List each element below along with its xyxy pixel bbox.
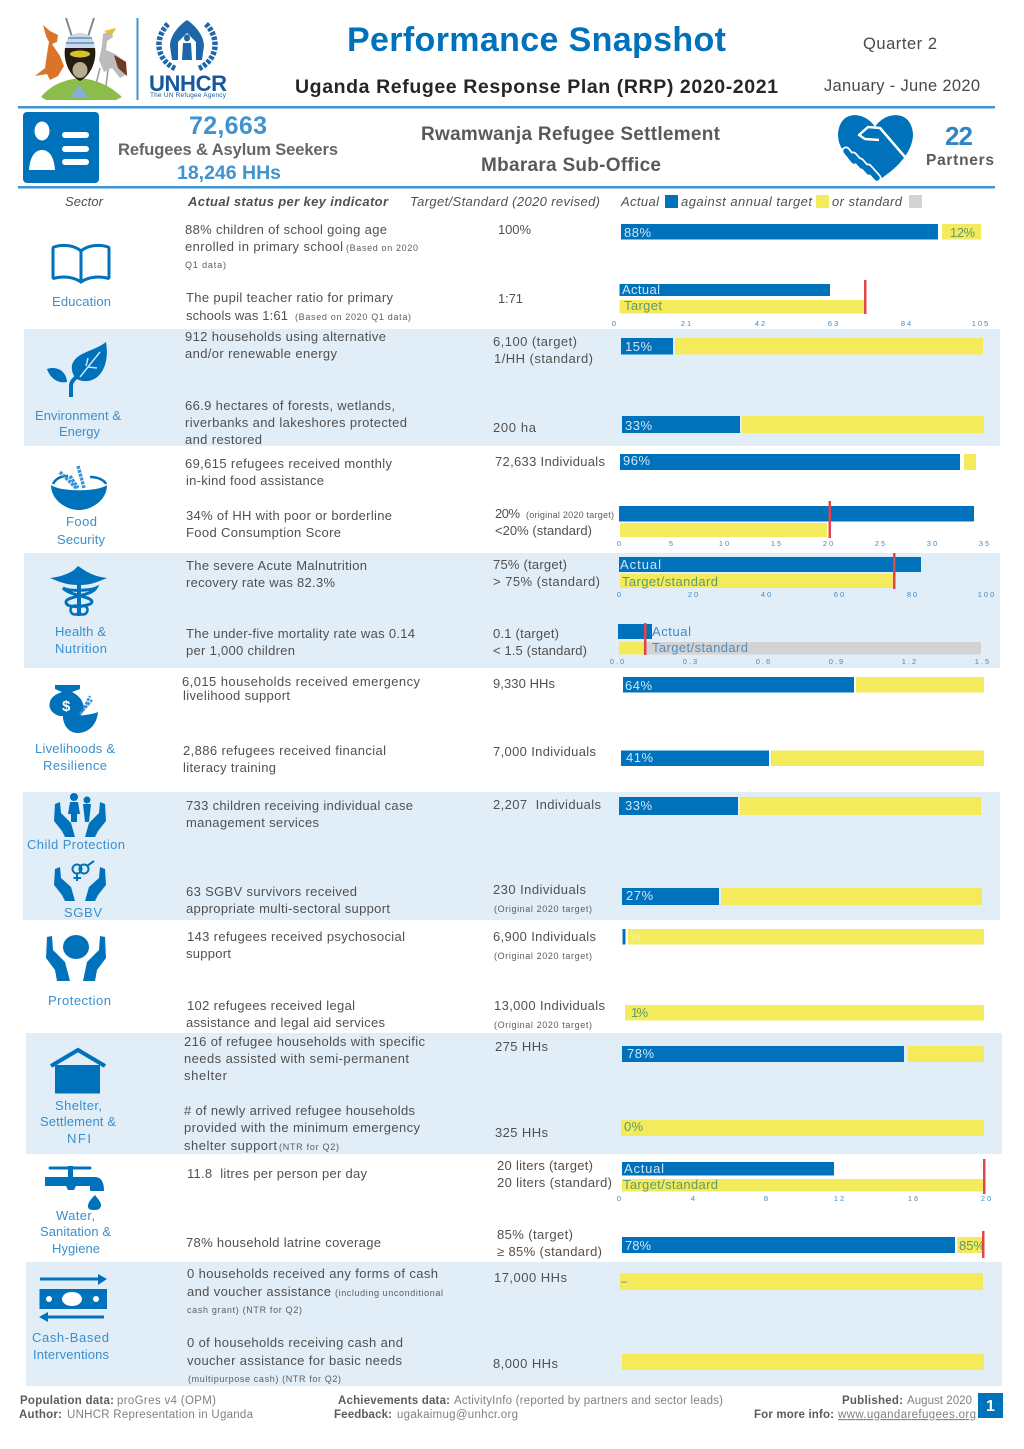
achievements data source: [338, 1395, 723, 1407]
indicator text: emergency shelter: (NTR for Q2): [279, 1142, 339, 1152]
indicator text: legal assistance: [186, 998, 386, 1030]
sector label: Water,: [56, 1208, 95, 1223]
sector label: Environment &: [35, 408, 121, 423]
footer: [19, 1393, 1003, 1421]
published date: August 2020: [907, 1395, 972, 1407]
indicator text: basic needs: 0 of households receiving cash and: [187, 1335, 403, 1350]
table header and legend: Actual: [620, 194, 660, 209]
indicator text: food consumption score: [186, 508, 392, 540]
indicator text: emergency shelter: provided with the minimum emergency: [184, 1120, 420, 1135]
target: pupil teacher ratio: 1:71: [498, 291, 523, 306]
bar: forests: 33%: [625, 418, 652, 433]
logo: UNHCR: [149, 20, 227, 99]
chart: pupil teacher ratio: 42: [755, 319, 767, 328]
sector label: Security: [57, 532, 106, 547]
bar: financial literacy: [621, 750, 984, 766]
chart: malnutrition: Target/standard: [622, 574, 718, 589]
sector label: SGBV: [64, 905, 102, 920]
panel: sector band environment: [24, 329, 1000, 446]
chart: malnutrition: 20: [688, 590, 700, 599]
bar: emergency shelter: [621, 1119, 984, 1136]
target: emergency livelihood: 9,330 HHs: [493, 676, 556, 691]
indicator text: legal assistance: assistance and legal aid services: [186, 1015, 386, 1030]
sector label: [35, 408, 121, 439]
chart: food consumption score: 25: [875, 539, 887, 548]
feedback contact: [334, 1409, 518, 1421]
target: malnutrition: 75% (target): [493, 557, 567, 572]
chart: mortality: 0.0: [610, 657, 626, 666]
table header and legend: Actual status per key indicator: [187, 194, 389, 209]
chart: litres per person: 8: [764, 1194, 770, 1203]
partners count: 22: [945, 121, 973, 151]
households: 18,246 HHs: [177, 162, 281, 184]
bar: case management: 33%: [625, 798, 652, 813]
chart: litres per person: 20: [981, 1194, 993, 1203]
bar: food assistance: [620, 453, 976, 470]
indicator text: semi-permanent shelter: 216 of refugee households with specific: [184, 1034, 426, 1049]
sector row: Cash-Based Interventions: [32, 1266, 984, 1384]
chart: pupil teacher ratio: 63: [828, 319, 840, 328]
icon: money bag and bowl: $: [62, 698, 71, 715]
chart: pupil teacher ratio: Actual: [622, 282, 660, 297]
sub-office: Mbarara Sub-Office: [481, 155, 661, 176]
target: food consumption score: (original 2020 target): [526, 510, 614, 520]
table header and legend: or standard: [832, 194, 903, 209]
sector label: Cash-Based: [32, 1330, 109, 1345]
target: legal assistance: (Original 2020 target): [494, 1020, 592, 1030]
page number: [978, 1393, 1003, 1418]
author: UNHCR Representation in Uganda: [67, 1409, 254, 1421]
target: legal assistance: 13,000 Individuals: [494, 998, 606, 1013]
bar: forests: [622, 416, 984, 433]
icon: hands holding children: [54, 793, 106, 837]
indicator text: malnutrition: The severe Acute Malnutrition: [186, 558, 367, 573]
sector row: Protection: [46, 929, 984, 1030]
indicator text: mortality: [186, 626, 415, 658]
target: mortality: [493, 626, 587, 658]
icon: person id card: [23, 112, 99, 183]
indicator text: pupil teacher ratio: [186, 290, 411, 323]
indicator text: psychosocial support: support: [186, 946, 231, 961]
indicator text: psychosocial support: [186, 929, 405, 961]
target: psychosocial support: [493, 929, 596, 961]
bar: legal assistance: 1%: [631, 1005, 648, 1020]
settlement name: Rwamwanja Refugee Settlement: [421, 124, 721, 145]
indicator text: mortality: The under-five mortality rate was 0.14: [186, 626, 415, 641]
indicator text: forests: [185, 398, 407, 447]
indicator text: financial literacy: 2,886 refugees received financial: [183, 743, 386, 758]
icon: house: [51, 1050, 105, 1094]
chart: mortality: [610, 623, 991, 666]
target: latrine coverage: 85% (target): [497, 1227, 573, 1242]
logo: UNHCR: The UN Refugee Agency: [150, 92, 227, 99]
sector row: Food Security: [51, 453, 991, 548]
achievements data source: Achievements data:: [338, 1395, 450, 1407]
indicator text: psychosocial support: 143 refugees received psychosocial: [187, 929, 405, 944]
indicator text: enrolment: [185, 222, 418, 270]
indicator text: SGBV survivors: 63 SGBV survivors received: [186, 884, 357, 899]
bar: enrolment: 12%: [950, 225, 975, 240]
sector label: Settlement &: [40, 1114, 116, 1129]
bar: semi-permanent shelter: [622, 1046, 984, 1062]
indicator text: semi-permanent shelter: shelter: [184, 1068, 228, 1083]
indicator text: latrine coverage: 78% household latrine coverage: [186, 1235, 381, 1250]
chart: malnutrition: 60: [834, 590, 846, 599]
indicator text: litres per person: 11.8 litres per person per day: [187, 1166, 368, 1181]
achievements data source: ActivityInfo (reported by partners and sector leads): [454, 1395, 723, 1407]
bar: SGBV survivors: 27%: [626, 888, 653, 903]
indicator text: emergency livelihood: [182, 674, 420, 703]
table header and legend: against annual target: [681, 194, 813, 209]
bar: enrolment: 88%: [624, 225, 651, 240]
target: latrine coverage: [497, 1227, 602, 1259]
sector label: Food: [66, 514, 97, 529]
header: [35, 18, 980, 100]
indicator text: food consumption score: 34% of HH with poor or borderline: [186, 508, 392, 523]
target: energy: [493, 334, 593, 366]
chart: litres per person: Target/standard: [623, 1177, 718, 1192]
target: case management: 2,207 Individuals: [493, 797, 602, 812]
chart: food consumption score: 15: [771, 539, 783, 548]
bar: latrine coverage: [622, 1231, 985, 1258]
target: emergency shelter: 325 HHs: [495, 1125, 548, 1140]
page number: 1: [986, 1398, 995, 1415]
bar: emergency livelihood: 64%: [625, 678, 652, 693]
sector label: Child Protection: [27, 837, 125, 852]
indicator text: malnutrition: [186, 558, 367, 590]
bar: emergency livelihood: [623, 677, 984, 693]
indicator text: emergency shelter: shelter support: [184, 1138, 277, 1153]
chart: mortality: 1.2: [902, 657, 918, 666]
icon: money bag and bowl: [49, 685, 98, 733]
target: food consumption score: 20%: [495, 506, 520, 521]
population summary: [23, 112, 994, 184]
target: malnutrition: [493, 557, 600, 589]
indicator text: case management: [186, 798, 413, 830]
indicator text: food assistance: [185, 456, 392, 488]
indicator text: food consumption score: Food Consumption Score: [186, 525, 341, 540]
target: semi-permanent shelter: 275 HHs: [495, 1039, 548, 1054]
indicator text: food assistance: in-kind food assistance: [186, 473, 324, 488]
target: food consumption score: [495, 506, 614, 538]
indicator text: food assistance: 69,615 refugees received monthly: [185, 456, 392, 471]
target: energy: 6,100 (target): [493, 334, 577, 349]
chart: litres per person: 16: [908, 1194, 920, 1203]
partners caption: Partners: [926, 152, 994, 169]
logo: UNHCR: UNHCR: [149, 71, 227, 96]
sector label: Sanitation &: [40, 1224, 111, 1239]
chart: litres per person: 4: [691, 1194, 697, 1203]
author: Author:: [19, 1409, 62, 1421]
indicator text: energy: and/or renewable energy: [185, 346, 338, 361]
chart: food consumption score: 20: [823, 539, 835, 548]
chart: pupil teacher ratio: [612, 280, 990, 328]
target: malnutrition: > 75% (standard): [493, 574, 600, 589]
sector label: Resilience: [43, 758, 107, 773]
icon: hands holding person: [46, 935, 106, 981]
bar: case management: [619, 797, 981, 815]
bar: latrine coverage: 85%: [959, 1238, 985, 1253]
indicator text: pupil teacher ratio: schools was 1:61: [186, 308, 288, 323]
indicator text: emergency shelter: # of newly arrived refugee households: [184, 1103, 416, 1118]
indicator text: cash and voucher: 0 households received any forms of cash: [187, 1266, 438, 1281]
icon: tap and water drop: [45, 1166, 104, 1210]
population caption: Refugees & Asylum Seekers: [118, 141, 338, 159]
indicator text: enrolment: Q1 data): [185, 260, 226, 270]
indicator text: energy: 912 households using alternative: [185, 329, 386, 344]
indicator text: cash and voucher: [187, 1266, 443, 1315]
sector label: NFI: [67, 1131, 91, 1146]
target: mortality: < 1.5 (standard): [493, 643, 587, 658]
panel: sector band shelter: [26, 1033, 1002, 1154]
indicator text: cash and voucher: (including unconditional: [335, 1288, 443, 1298]
indicator text: enrolment: enrolled in primary school: [185, 239, 343, 254]
icon: handshake heart: [838, 115, 913, 178]
indicator text: financial literacy: literacy training: [183, 760, 276, 775]
sector row: SGBV: [54, 861, 982, 920]
target: mortality: 0.1 (target): [493, 626, 559, 641]
chart: mortality: 1.5: [975, 657, 991, 666]
indicator text: basic needs: [187, 1335, 403, 1384]
target: financial literacy: 7,000 Individuals: [493, 744, 596, 759]
subtitle: Uganda Refugee Response Plan (RRP) 2020-2021: [295, 76, 778, 98]
sector row: Child Protection: [27, 793, 981, 852]
target: SGBV survivors: (Original 2020 target): [494, 904, 592, 914]
icon: bowl with wheat: [51, 466, 107, 510]
sector label: Protection: [48, 993, 111, 1008]
indicator text: pupil teacher ratio: The pupil teacher ratio for primary: [186, 290, 394, 305]
indicator text: enrolment: (Based on 2020: [346, 243, 418, 253]
panel: sector band cash: [26, 1262, 1002, 1386]
target: food consumption score: <20% (standard): [495, 523, 592, 538]
table header and legend: Sector: [65, 194, 104, 209]
sector row: Shelter, Settlement and NFI: [40, 1034, 984, 1153]
sector label: [57, 514, 106, 547]
bar: SGBV survivors: [622, 888, 982, 905]
panel: sector band health: [24, 553, 1000, 668]
logo: Uganda coat of arms: [35, 18, 127, 100]
sector label: [40, 1098, 116, 1146]
indicator text: malnutrition: recovery rate was 82.3%: [186, 575, 335, 590]
target: SGBV survivors: 230 Individuals: [493, 882, 586, 897]
table header and legend: [65, 194, 922, 209]
icon: caduceus: [50, 566, 107, 616]
sector row: Environment and Energy: [35, 329, 984, 447]
bar: legal assistance: [625, 1005, 984, 1020]
sector label: Hygiene: [52, 1241, 100, 1256]
indicator text: semi-permanent shelter: needs assisted with semi-permanent: [184, 1051, 409, 1066]
indicator text: semi-permanent shelter: [184, 1034, 426, 1083]
quarter label: Quarter 2: [863, 35, 937, 53]
chart: food consumption score: [617, 501, 991, 548]
sector label: [40, 1208, 111, 1256]
indicator text: forests: 66.9 hectares of forests, wetlands,: [185, 398, 395, 413]
chart: litres per person: Actual: [624, 1161, 664, 1176]
sector row: Livelihoods and Resilience: [35, 674, 984, 775]
population data source: Population data:: [20, 1395, 114, 1407]
target: litres per person: [497, 1158, 612, 1190]
chart: mortality: 0.9: [829, 657, 845, 666]
indicator text: SGBV survivors: [186, 884, 390, 916]
bar: psychosocial support: %: [630, 930, 641, 944]
chart: malnutrition: Actual: [620, 557, 661, 572]
bar: enrolment: [621, 224, 981, 240]
indicator text: mortality: per 1,000 children: [186, 643, 295, 658]
sector row: Education: [52, 222, 990, 328]
reporting period: January - June 2020: [824, 77, 980, 95]
refugee population: 72,663: [189, 112, 267, 140]
indicator text: forests: and restored: [185, 432, 262, 447]
indicator text: emergency shelter: [184, 1103, 420, 1153]
chart: pupil teacher ratio: 84: [901, 319, 913, 328]
sector label: Education: [52, 294, 111, 309]
sector label: [32, 1330, 110, 1362]
bar: food assistance: 96%: [623, 453, 650, 468]
indicator text: cash and voucher: cash grant) (NTR for Q2): [187, 1305, 302, 1315]
panel: sector band child protection and SGBV: [23, 792, 1000, 920]
bar: latrine coverage: 78%: [625, 1238, 651, 1253]
indicator text: case management: management services: [186, 815, 320, 830]
bar: basic needs: [622, 1354, 984, 1370]
more info link: For more info:: [754, 1409, 834, 1421]
chart: litres per person: [617, 1159, 993, 1203]
target: forests: 200 ha: [493, 420, 537, 435]
more info link: [754, 1409, 976, 1421]
chart: mortality: 0.3: [683, 657, 699, 666]
bar: energy: [621, 338, 983, 354]
icon: plant leaves: [47, 342, 107, 397]
sector label: Energy: [59, 424, 100, 439]
chart: mortality: 0.6: [756, 657, 772, 666]
chart: malnutrition: [617, 553, 996, 599]
chart: pupil teacher ratio: Target: [624, 298, 662, 313]
published date: Published:: [842, 1395, 903, 1407]
indicator text: basic needs: voucher assistance for basic needs: [187, 1353, 402, 1368]
icon: open book: [53, 245, 109, 282]
icon: hands holding gender symbols: [54, 861, 106, 901]
bar: cash and voucher: [620, 1273, 983, 1290]
chart: pupil teacher ratio: 21: [681, 319, 693, 328]
chart: malnutrition: 0: [617, 590, 623, 599]
indicator text: forests: riverbanks and lakeshores protected: [185, 415, 407, 430]
target: legal assistance: [494, 998, 606, 1030]
indicator text: emergency livelihood: livelihood support: [183, 688, 290, 703]
target: psychosocial support: 6,900 Individuals: [493, 929, 596, 944]
table header and legend: Target/Standard (2020 revised): [410, 194, 600, 209]
indicator text: pupil teacher ratio: (Based on 2020 Q1 data): [295, 312, 411, 322]
chart: food consumption score: 30: [927, 539, 939, 548]
feedback contact: ugakaimug@unhcr.org: [397, 1409, 518, 1421]
indicator text: SGBV survivors: appropriate multi-sectoral support: [186, 901, 390, 916]
target: basic needs: 8,000 HHs: [493, 1356, 558, 1371]
bar: financial literacy: 41%: [626, 750, 653, 765]
feedback contact: Feedback:: [334, 1409, 392, 1421]
indicator text: financial literacy: [183, 743, 386, 775]
target: latrine coverage: ≥ 85% (standard): [497, 1244, 602, 1259]
indicator text: basic needs: (multipurpose cash) (NTR for Q2): [188, 1374, 341, 1384]
chart: malnutrition: 80: [907, 590, 919, 599]
sector row: Water, Sanitation and Hygiene: [40, 1158, 993, 1259]
sector row: Health and Nutrition: [50, 553, 996, 666]
chart: pupil teacher ratio: 0: [612, 319, 618, 328]
chart: food consumption score: 35: [979, 539, 991, 548]
title: Performance Snapshot: [347, 21, 726, 59]
target: litres per person: 20 liters (target): [497, 1158, 593, 1173]
chart: litres per person: 12: [834, 1194, 846, 1203]
target: enrolment: 100%: [498, 222, 531, 237]
chart: litres per person: 0: [617, 1194, 623, 1203]
bar: emergency shelter: 0%: [624, 1119, 643, 1134]
indicator text: energy: [185, 329, 386, 361]
indicator text: legal assistance: 102 refugees received legal: [187, 998, 355, 1013]
sector label: Shelter,: [55, 1098, 102, 1113]
indicator text: cash and voucher: and voucher assistance: [187, 1284, 331, 1299]
more info link: www.ugandarefugees.org: [837, 1409, 976, 1421]
chart: food consumption score: 10: [719, 539, 731, 548]
chart: food consumption score: 0: [617, 539, 623, 548]
bar: psychosocial support: [622, 929, 984, 944]
chart: malnutrition: 40: [761, 590, 773, 599]
sector label: Nutrition: [55, 641, 107, 656]
chart: pupil teacher ratio: 105: [972, 319, 990, 328]
population data source: proGres v4 (OPM): [117, 1395, 216, 1407]
target: food assistance: 72,633 Individuals: [495, 454, 606, 469]
target: psychosocial support: (Original 2020 target): [494, 951, 592, 961]
divider line between logos: [136, 18, 138, 100]
sector label: [55, 624, 107, 656]
sector label: Interventions: [33, 1347, 110, 1362]
bar: semi-permanent shelter: 78%: [627, 1046, 654, 1061]
target: litres per person: 20 liters (standard): [497, 1175, 612, 1190]
chart: malnutrition: 100: [978, 590, 996, 599]
population data source: [20, 1395, 216, 1407]
published date: [842, 1395, 972, 1407]
bar: cash and voucher: –: [621, 1276, 628, 1288]
bar: energy: 15%: [625, 339, 652, 354]
chart: mortality: Actual: [652, 624, 691, 639]
target: energy: 1/HH (standard): [494, 351, 593, 366]
chart: mortality: Target/standard: [652, 640, 748, 655]
icon: banknote with arrows: [39, 1274, 107, 1322]
indicator text: enrolment: 88% children of school going age: [185, 222, 387, 237]
indicator text: case management: 733 children receiving individual case: [186, 798, 413, 813]
target: SGBV survivors: [493, 882, 592, 914]
indicator text: emergency livelihood: 6,015 households received emergency: [182, 674, 420, 689]
sector label: Livelihoods &: [35, 741, 115, 756]
target: cash and voucher: 17,000 HHs: [494, 1270, 568, 1285]
sector label: Health &: [55, 624, 106, 639]
chart: food consumption score: 5: [669, 539, 675, 548]
sector label: [35, 741, 115, 773]
